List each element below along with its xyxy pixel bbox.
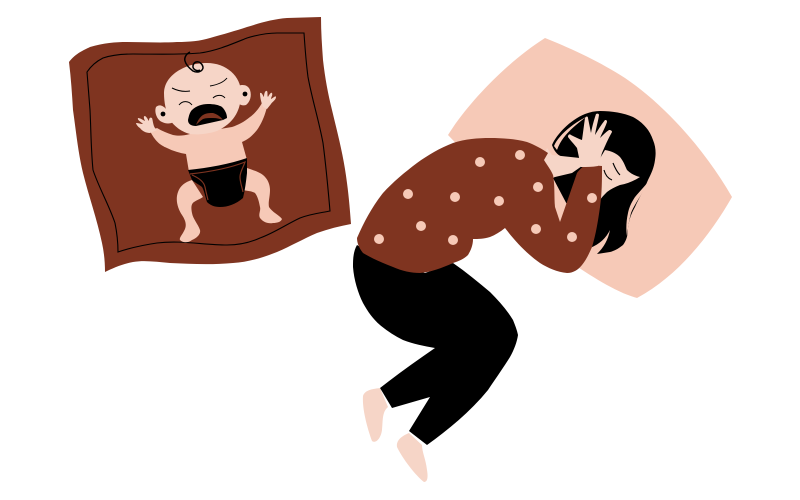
mother feet bbox=[363, 388, 428, 482]
baby torso and arms bbox=[150, 103, 267, 172]
sweater polka dots bbox=[374, 150, 597, 245]
mother face bbox=[596, 150, 640, 200]
baby head bbox=[164, 63, 241, 134]
pillow bbox=[448, 38, 732, 298]
mother neck and shoulder bbox=[543, 148, 582, 177]
mother hand on head bbox=[568, 114, 612, 167]
mother closed eye bbox=[604, 163, 620, 180]
mother sweater bbox=[357, 138, 602, 273]
mother trousers bbox=[353, 245, 518, 445]
mother hair bbox=[552, 111, 656, 254]
baby crying face bbox=[172, 78, 227, 126]
baby legs bbox=[177, 168, 282, 242]
baby hair curl bbox=[185, 52, 203, 72]
panel: baby blanket bbox=[69, 17, 351, 272]
baby bbox=[136, 52, 282, 242]
mother bbox=[353, 111, 656, 482]
baby ears bbox=[155, 85, 251, 124]
baby hands bbox=[136, 91, 276, 133]
baby diaper bbox=[188, 158, 247, 207]
